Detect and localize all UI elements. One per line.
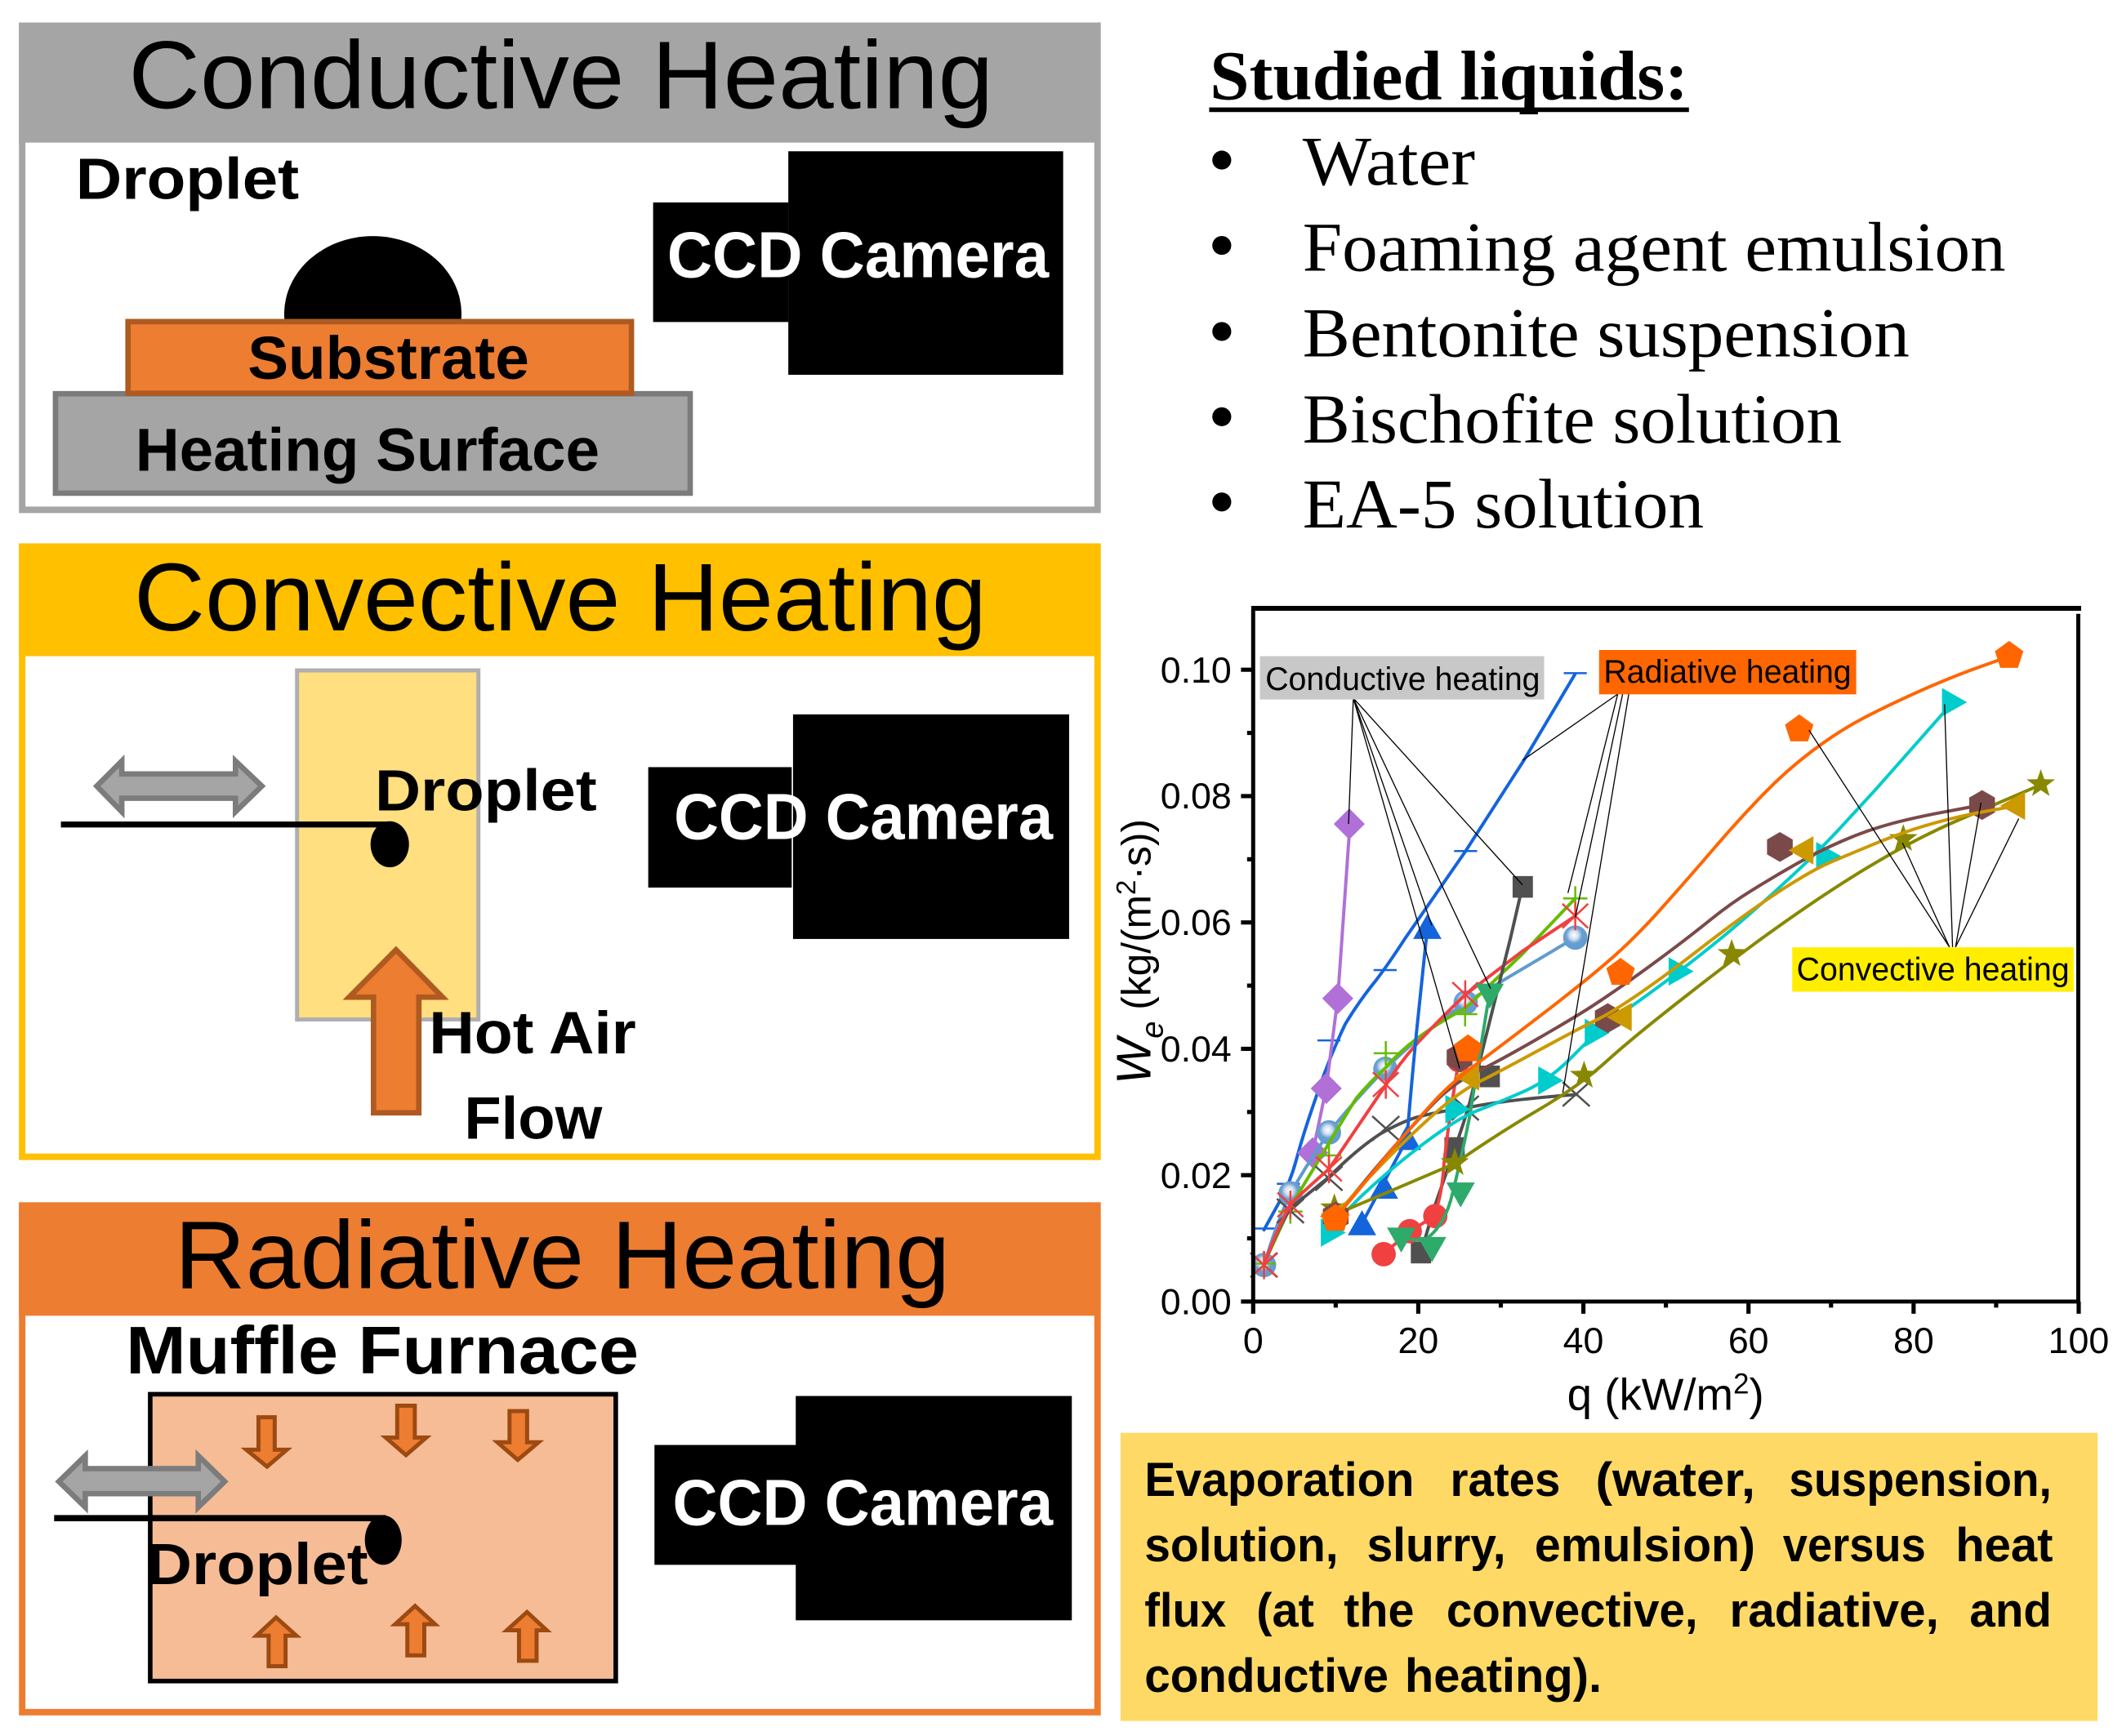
caption: evaporation rates: (at [1256,1585,1314,1637]
holder rod [61,821,390,827]
substrate [128,322,631,394]
y axis title: e [1135,1022,1170,1039]
panel: convective heating [19,544,1100,1157]
x axis tick labels: 60 [1728,1321,1769,1361]
x axis title: 2 [1733,1369,1749,1400]
header band: conductive heating [19,23,1100,143]
droplet [365,1516,402,1565]
y axis tick labels: 0.06 [1161,903,1232,943]
x axis tick labels: 40 [1563,1321,1603,1361]
x axis tick labels: 80 [1893,1321,1934,1361]
title: Conductive Heating: Conductive Heating [128,22,993,129]
callout leader lines: conductive heating [1349,698,1522,1068]
caption: evaporation rates: (water, [1595,1454,1755,1507]
heading: studied liquids: Studied liquids: [1210,37,1688,115]
callout leader lines: radiative heating [1522,694,1629,1093]
y axis title: 2 [1112,880,1142,895]
droplet [371,821,409,867]
series: brown hexagons [1323,790,1995,1231]
series: blue triangles [1348,914,1442,1235]
caption: evaporation rates: rates [1451,1454,1560,1507]
heating surface [56,394,690,493]
label: hot air flow: Hot Air [429,1000,636,1066]
caption: evaporation rates: heating). [1405,1650,1602,1703]
caption: evaporation rates: radiative, [1730,1585,1939,1637]
caption: evaporation rates [1121,1433,2097,1721]
series: red asterisks [1251,901,1588,1280]
caption: evaporation rates: convective, [1447,1585,1698,1637]
title: Radiative Heating: Radiative Heating [175,1201,950,1308]
y axis tick labels [1161,651,1232,1323]
heated air column [297,670,479,1019]
droplet on substrate [284,236,461,392]
icon: CCD camera: CCD Camera [672,1466,1054,1538]
holder rod [54,1515,386,1521]
header band: radiative heating [19,1203,1100,1315]
panel: conductive heating [19,22,1100,510]
caption: evaporation rates: heat [1955,1520,2053,1572]
series: orange pentagons [1321,641,2023,1231]
x axis title: ) [1749,1370,1764,1420]
caption: evaporation rates: conductive [1144,1650,1389,1703]
y axis title: W [1106,1035,1161,1084]
list item: water [1212,122,1475,200]
x axis tick labels: 0 [1243,1321,1264,1361]
heat arrows pointing up [256,1606,546,1666]
substrate: Substrate [247,324,529,392]
title: Convective Heating: Convective Heating [134,544,987,651]
label: conductive heating: Conductive heating [1265,661,1540,697]
caption: evaporation rates: and [1969,1585,2052,1637]
caption: evaporation rates: emulsion) [1535,1520,1755,1572]
caption: evaporation rates: slurry, [1366,1520,1506,1572]
caption: evaporation rates: suspension, [1789,1454,2052,1507]
label: droplet: Droplet [375,759,597,823]
caption: evaporation rates: solution, [1144,1520,1339,1572]
y axis tick labels: 0.02 [1161,1156,1232,1196]
chart axes and ticks [1241,608,2081,1314]
caption: evaporation rates: flux [1144,1585,1226,1637]
y axis tick labels: 0.08 [1161,777,1232,817]
icon: CCD camera: CCD Camera [667,219,1050,292]
label: droplet: Droplet [146,1533,368,1597]
series: dark crosses [1250,1082,1589,1277]
heating surface: Heating Surface [136,416,600,484]
series: cyan right triangles [1321,688,1967,1247]
text block: studied liquids [1209,37,2006,543]
label: convective heating: Convective heating [1797,951,2070,987]
y axis tick labels: 0.10 [1161,651,1232,691]
icon: hot air arrow [349,950,443,1113]
label: muffle furnace: Muffle Furnace [126,1312,639,1388]
series: blue spheres [1252,925,1588,1277]
y axis title: ·s)) [1113,819,1159,880]
list item: bischofite solution: Bischofite solution [1303,380,1842,458]
list item: EA-5 solution: EA-5 solution [1303,465,1704,543]
x axis tick labels [1243,1321,2109,1361]
y axis tick labels: 0.00 [1161,1283,1232,1323]
chart: evaporation rate versus heat flux [1106,608,2109,1420]
label: hot air flow: Flow [464,1085,603,1151]
series: gold left triangles [1320,791,2025,1231]
series: green inverted triangles [1387,984,1504,1262]
series: olive stars [1320,769,2055,1220]
series: green plus [1252,886,1588,1275]
series: purple diamonds [1297,808,1365,1168]
label: droplet: Droplet [76,148,299,212]
icon: CCD camera [649,714,1069,939]
x axis tick labels: 100 [2048,1321,2109,1361]
icon: CCD camera: CCD Camera [674,780,1054,852]
icon: CCD camera [653,151,1063,375]
list item: foaming agent emulsion: Foaming agent emulsion [1303,207,2006,286]
series: blue dash [1252,673,1587,1230]
x axis tick labels: 20 [1398,1321,1438,1361]
series: red circles [1371,1048,1471,1266]
muffle furnace chamber [150,1394,616,1681]
label: radiative heating: Radiative heating [1603,654,1852,690]
icon: double arrow [96,761,262,812]
icon: double arrow [59,1456,225,1507]
y axis title: (kg/(m [1113,895,1159,1022]
list item: water: Water [1303,122,1475,200]
panel: radiative heating [19,1201,1100,1712]
y axis tick labels: 0.04 [1161,1030,1232,1070]
caption: evaporation rates: versus [1783,1520,1926,1572]
x axis title: q (kW/m [1567,1370,1733,1420]
caption: evaporation rates: the [1344,1585,1414,1637]
callout leader lines: convective heating [1809,704,2019,947]
caption: evaporation rates: Evaporation [1144,1454,1414,1507]
label: hot air flow [429,1000,636,1151]
list item: bentonite suspension: Bentonite suspension [1303,294,1910,372]
series: dark squares [1411,876,1533,1263]
heat arrows pointing down [247,1406,538,1467]
icon: CCD camera [654,1396,1072,1620]
header band: convective heating [19,544,1100,657]
